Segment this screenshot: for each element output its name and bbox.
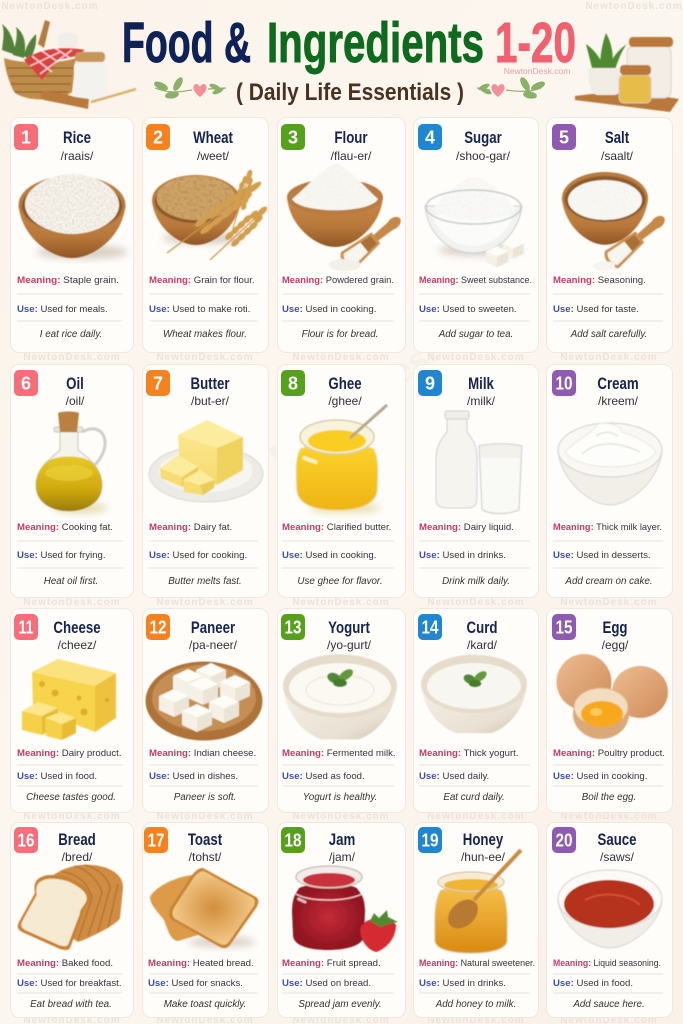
example sentence: Yogurt is healthy.: [303, 792, 377, 803]
pronunciation: /saws/: [600, 850, 635, 864]
example sentence: Heat oil first.: [44, 576, 98, 587]
meaning: Meaning: Heated bread.: [148, 958, 254, 969]
use: Use: Used in cooking.: [553, 771, 647, 782]
watermark strips: NewtonDesk.com: [427, 597, 525, 608]
watermark strips: NewtonDesk.com: [292, 811, 390, 822]
card 16: Bread: 16: [18, 830, 34, 850]
illustration: oil bottle: [36, 412, 108, 513]
watermark strips: NewtonDesk.com: [560, 352, 658, 363]
badge 2: [146, 124, 170, 150]
example sentence: Butter melts fast.: [168, 576, 242, 587]
watermark strips: NewtonDesk.com: [427, 811, 525, 822]
meaning: Meaning: Clarified butter.: [282, 522, 391, 533]
word: Cream: Cream: [597, 375, 639, 393]
meaning: Meaning: Cooking fat.: [17, 522, 113, 533]
pronunciation: /shoo-gar/: [456, 149, 511, 163]
watermark strips: NewtonDesk.com: [156, 811, 254, 822]
badge 19: [418, 827, 442, 853]
card 3: Flour: [278, 118, 407, 352]
illustration: curd bowl: [421, 655, 527, 733]
illustration: cheese blocks: [22, 659, 116, 740]
word: Toast: Toast: [188, 831, 222, 849]
illustration: sliced bread loaf: [18, 865, 123, 950]
card 20: Sauce: 20: [556, 830, 572, 850]
use: Use: Used in cooking.: [282, 304, 376, 315]
pronunciation: /but-er/: [191, 394, 230, 408]
example sentence: Use ghee for flavor.: [297, 576, 383, 587]
card 15: Egg: [546, 608, 672, 812]
word: Flour: Flour: [334, 129, 368, 147]
pronunciation: /oil/: [66, 394, 85, 408]
meaning: Meaning: Poultry product.: [553, 748, 665, 759]
word: Honey: Honey: [463, 831, 504, 849]
pronunciation: /ghee/: [328, 394, 362, 408]
illustration: basket, milk jar and scoop: [2, 20, 136, 109]
example sentence: I eat rice daily.: [40, 329, 102, 340]
badge 12: [146, 614, 170, 640]
card 19: Honey: 19: [422, 830, 438, 850]
badge 3: [281, 124, 305, 150]
use: Use: Used for meals.: [17, 304, 108, 315]
pronunciation: /kreem/: [598, 394, 639, 408]
example sentence: Add sugar to tea.: [438, 329, 513, 340]
card 6: Oil: 6: [21, 374, 31, 394]
example sentence: Add salt carefully.: [570, 329, 647, 340]
card 17: Toast: [142, 822, 268, 1018]
illustration: rice bowl: [18, 174, 128, 259]
pronunciation: /jam/: [329, 850, 356, 864]
illustration: yogurt bowl: [283, 654, 397, 739]
badge 9: [418, 370, 442, 396]
example sentence: Paneer is soft.: [174, 792, 236, 803]
meaning: Meaning: Fermented milk.: [282, 748, 396, 759]
example sentence: Eat curd daily.: [443, 792, 505, 803]
card 7: Butter: 7: [153, 374, 163, 394]
pronunciation: /pa-neer/: [189, 638, 238, 652]
use: Use: Used for frying.: [17, 550, 106, 561]
badge 11: [14, 614, 38, 640]
card 2: Wheat: 2: [153, 128, 163, 148]
use: Use: Used to sweeten.: [419, 304, 517, 315]
card 5: Salt: [546, 118, 672, 352]
example sentence: Cheese tastes good.: [26, 792, 116, 803]
badge 17: [144, 827, 168, 853]
badge 10: [552, 370, 576, 396]
example sentence: Wheat makes flour.: [163, 329, 247, 340]
badge 5: [552, 124, 576, 150]
card 4: Sugar: 4: [425, 128, 435, 148]
illustration: flour bowl with scoop: [287, 163, 407, 272]
pronunciation: /weet/: [197, 149, 230, 163]
illustration: glass sugar bowl: [425, 177, 524, 267]
meaning: Meaning: Fruit spread.: [282, 958, 381, 969]
badge 13: [281, 614, 305, 640]
word: Salt: Salt: [605, 129, 629, 147]
word: Yogurt: Yogurt: [328, 619, 370, 637]
example sentence: Spread jam evenly.: [298, 999, 382, 1010]
title: 1-20: [495, 11, 576, 75]
pronunciation: /flau-er/: [331, 149, 372, 163]
card 13: Yogurt: [278, 608, 406, 812]
meaning: Meaning: Sweet substance.: [419, 275, 532, 286]
pronunciation: /cheez/: [58, 638, 97, 652]
card 12: Paneer: 12: [150, 618, 166, 638]
card 16: Bread: [10, 822, 134, 1018]
title: Food &: [122, 11, 251, 75]
pronunciation: /saalt/: [601, 149, 634, 163]
word: Butter: Butter: [190, 375, 230, 393]
card 13: Yogurt: 13: [284, 618, 302, 638]
example sentence: Add sauce here.: [572, 999, 645, 1010]
icon: left laurel with heart: [153, 76, 226, 100]
card 19: Honey: [414, 822, 538, 1018]
word: Egg: Egg: [602, 619, 628, 637]
example sentence: Flour is for bread.: [302, 329, 378, 340]
watermark strips: NewtonDesk.com: [560, 811, 658, 822]
card 9: Milk: 9: [425, 374, 435, 394]
badge 6: [14, 370, 38, 396]
illustration: honey jar with dipper: [435, 850, 521, 953]
card 2: Wheat: [142, 118, 272, 352]
watermark strips: NewtonDesk.com: [292, 597, 390, 608]
card 1: Rice: 1: [21, 128, 31, 148]
badge 20: [552, 827, 576, 853]
use: Use: Used in cooking.: [282, 550, 376, 561]
card 20: Sauce: [546, 822, 672, 1018]
watermark strips: NewtonDesk.com: [23, 597, 121, 608]
meaning: Meaning: Baked food.: [17, 958, 113, 969]
icon: right laurel with heart: [477, 76, 546, 100]
card 10: Cream: [546, 364, 672, 598]
card 5: Salt: 5: [559, 128, 569, 148]
word: Cheese: Cheese: [53, 619, 101, 637]
use: Use: Used daily.: [419, 771, 489, 782]
watermark strips: NewtonDesk.com: [292, 352, 390, 363]
use: Use: Used in food.: [553, 978, 633, 989]
use: Use: Used to make roti.: [149, 304, 250, 315]
example sentence: Drink milk daily.: [442, 576, 510, 587]
watermark strips: NewtonDesk.com: [23, 811, 121, 822]
illustration: toast slices: [150, 868, 258, 948]
example sentence: Add cream on cake.: [564, 576, 653, 587]
example sentence: Add honey to milk.: [435, 999, 516, 1010]
example sentence: Make toast quickly.: [164, 999, 246, 1010]
use: Use: Used for snacks.: [148, 978, 243, 989]
card 17: Toast: 17: [148, 830, 164, 850]
badge 14: [418, 614, 442, 640]
pronunciation: /tohst/: [189, 850, 222, 864]
card 12: Paneer: [142, 608, 268, 812]
use: Use: Used in drinks.: [419, 550, 506, 561]
pronunciation: /milk/: [467, 394, 496, 408]
word: Sauce: Sauce: [597, 831, 637, 849]
badge 1: [14, 124, 38, 150]
illustration: salt bowl with scoop: [562, 172, 671, 271]
illustration: jam jar with strawberry: [292, 866, 398, 952]
card 7: Butter: [142, 364, 268, 598]
card 14: Curd: [414, 608, 538, 812]
card 8: Ghee: 8: [288, 374, 298, 394]
watermark strips: NewtonDesk.com: [560, 597, 658, 608]
subtitle: ( Daily Life Essentials ): [236, 79, 464, 106]
card 1: Rice: [10, 118, 134, 352]
watermark strips: NewtonDesk.com: [1, 1, 99, 12]
use: Use: Used in food.: [17, 771, 97, 782]
meaning: Meaning: Dairy liquid.: [419, 522, 514, 533]
card 14: Curd: 14: [422, 618, 438, 638]
use: Use: Used in desserts.: [553, 550, 651, 561]
pronunciation: /raais/: [61, 149, 94, 163]
meaning: Meaning: Dairy fat.: [149, 522, 232, 533]
card 15: Egg: 15: [556, 618, 572, 638]
watermark strips: NewtonDesk.com: [23, 352, 121, 363]
meaning: Meaning: Powdered grain.: [282, 275, 394, 286]
badge 4: [418, 124, 442, 150]
example sentence: Eat bread with tea.: [30, 999, 112, 1010]
badge 18: [281, 827, 305, 853]
title: Ingredients: [267, 11, 484, 75]
badge 15: [552, 614, 576, 640]
meaning: Meaning: Thick yogurt.: [419, 748, 519, 759]
word: Sugar: Sugar: [464, 129, 502, 147]
word: Paneer: Paneer: [191, 619, 235, 637]
meaning: Meaning: Staple grain.: [17, 275, 119, 286]
card 8: Ghee: [278, 364, 406, 598]
illustration: plant, jars and wooden board: [575, 33, 679, 112]
meaning: Meaning: Liquid seasoning.: [553, 958, 661, 969]
badge 8: [281, 370, 305, 396]
word: Ghee: Ghee: [328, 375, 362, 393]
pronunciation: /egg/: [602, 638, 629, 652]
watermark strips: NewtonDesk.com: [156, 352, 254, 363]
card 3: Flour: 3: [288, 128, 298, 148]
use: Use: Used for breakfast.: [17, 978, 122, 989]
watermark strips: NewtonDesk.com: [427, 352, 525, 363]
faint diagonal watermark: NewtonDesk.com: [263, 283, 517, 477]
card 4: Sugar: [414, 118, 538, 352]
word: Curd: Curd: [467, 619, 497, 637]
word: Jam: Jam: [329, 831, 355, 849]
pronunciation: /bred/: [62, 850, 93, 864]
use: Use: Used for taste.: [553, 304, 639, 315]
illustration: eggs with cracked shell: [556, 654, 668, 739]
card 6: Oil: [10, 364, 134, 598]
watermark strips: NewtonDesk.com: [156, 597, 254, 608]
use: Use: Used for cooking.: [149, 550, 247, 561]
use: Use: Used on bread.: [282, 978, 371, 989]
use: Use: Used in dishes.: [149, 771, 238, 782]
credit under title: NewtonDesk.com: [504, 66, 570, 76]
illustration: paneer cubes on wooden plate: [146, 662, 262, 740]
card 9: Milk: [414, 364, 538, 598]
card 18: Jam: [278, 822, 406, 1018]
card 10: Cream: 10: [556, 374, 572, 394]
illustration: milk bottle and glass: [436, 411, 522, 514]
word: Milk: Milk: [468, 375, 494, 393]
pronunciation: /yo-gurt/: [327, 638, 372, 652]
meaning: Meaning: Indian cheese.: [149, 748, 256, 759]
illustration: sauce bowl: [558, 870, 662, 948]
pronunciation: /hun-ee/: [461, 850, 506, 864]
use: Use: Used in drinks.: [419, 978, 506, 989]
meaning: Meaning: Thick milk layer.: [553, 522, 662, 533]
card 18: Jam: 18: [284, 830, 302, 850]
illustration: wheat bowl with stalks: [152, 168, 272, 265]
word: Wheat: Wheat: [193, 129, 233, 147]
card 11: Cheese: [10, 608, 134, 812]
meaning: Meaning: Dairy product.: [17, 748, 122, 759]
title: [122, 11, 576, 75]
word: Bread: Bread: [58, 831, 96, 849]
badge 7: [146, 370, 170, 396]
meaning: Meaning: Seasoning.: [553, 275, 646, 286]
meaning: Meaning: Grain for flour.: [149, 275, 255, 286]
illustration: butter on plate: [149, 420, 263, 502]
card 11: Cheese: 11: [18, 618, 34, 638]
example sentence: Boil the egg.: [582, 792, 636, 803]
pronunciation: /kard/: [467, 638, 498, 652]
use: Use: Used as food.: [282, 771, 365, 782]
watermark strips: NewtonDesk.com: [585, 1, 683, 12]
meaning: Meaning: Natural sweetener.: [419, 958, 535, 969]
word: Oil: Oil: [66, 375, 84, 393]
badge 16: [14, 827, 38, 853]
illustration: ghee jar with spoon: [296, 405, 387, 513]
illustration: cream bowl: [558, 423, 662, 505]
word: Rice: Rice: [63, 129, 91, 147]
